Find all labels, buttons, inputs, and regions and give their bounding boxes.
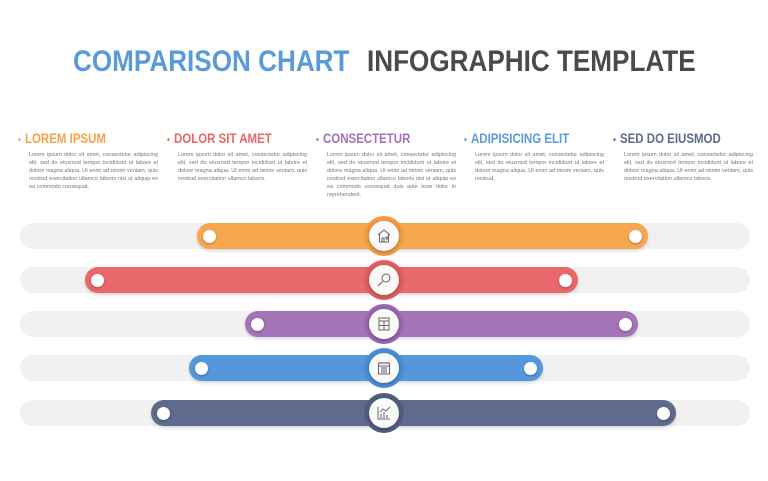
column: consectetur: Lorem ipsum dolor sit amet, consectetur adipiscing elit, sed do eiusmod tempor incididunt ut labore et dolore magna aliqua. Ut enim ad minim veniam, quis nostrud exercitation ullamco laboris nisi ut aliquip ex ea commodo consequat duis aute irure dolor in reprehenderit. — [327, 152, 456, 198]
column: lorem ipsum: Lorem ipsum dolor sit amet, consectetur adipiscing elit, sed do eiusmod tempor incididunt ut labore et dolore magna aliqua. Ut enim ad minim veniam, quis nostrud exercitation ullamco laboris nisi ut aliquip ex ea commodo consequat. — [29, 152, 158, 190]
title — [73, 45, 696, 78]
bar: navy — [151, 400, 676, 426]
column: dolor sit amet — [167, 130, 307, 182]
title part 2: INFOGRAPHIC TEMPLATE — [367, 45, 696, 78]
bar: purple — [245, 311, 638, 337]
column: lorem ipsum — [18, 130, 158, 190]
column: adipiscing elit: • ADIPISICING ELIT — [464, 130, 569, 146]
bar: orange — [197, 223, 648, 249]
track row 2 — [20, 267, 750, 293]
column: dolor sit amet: • DOLOR SIT AMET — [167, 130, 272, 146]
column: dolor sit amet: Lorem ipsum dolor sit amet, consectetur adipiscing elit, sed do eiusmod tempor incididunt ut labore et dolore magna aliqua. Ut enim ad minim veniam, quis nostrud exercitation ullamco laboris. — [178, 152, 307, 182]
track row 3 — [20, 311, 750, 337]
icon: magnifier — [364, 260, 404, 300]
icon: calculator — [364, 304, 404, 344]
column: lorem ipsum: • LOREM IPSUM — [18, 130, 106, 146]
icon: chart — [364, 393, 404, 433]
bar: red — [85, 267, 578, 293]
icon: calendar — [364, 348, 404, 388]
track row 1 — [20, 223, 750, 249]
track row 4 — [20, 355, 750, 381]
track row 5 — [20, 400, 750, 426]
title part 1: COMPARISON CHART — [73, 45, 349, 78]
icon: home — [364, 216, 404, 256]
column: sed do eiusmod: Lorem ipsum dolor sit amet, consectetur adipiscing elit, sed do eiusmod tempor incididunt ut labore et dolore magna aliqua. Ut enim ad minim veniam, quis nostrud exercitation ullamco laboris. — [624, 152, 753, 182]
column: adipiscing elit — [464, 130, 604, 182]
column: sed do eiusmod: • SED DO EIUSMOD — [613, 130, 721, 146]
column: consectetur: • CONSECTETUR — [316, 130, 410, 146]
bar: blue — [189, 355, 543, 381]
column: adipiscing elit: Lorem ipsum dolor sit amet, consectetur adipiscing elit, sed do eiusmod tempor incididunt ut labore et dolore magna aliqua. Ut enim ad minim veniam, quis nostrud. — [475, 152, 604, 182]
column: sed do eiusmod — [613, 130, 753, 182]
column: consectetur — [316, 130, 456, 198]
